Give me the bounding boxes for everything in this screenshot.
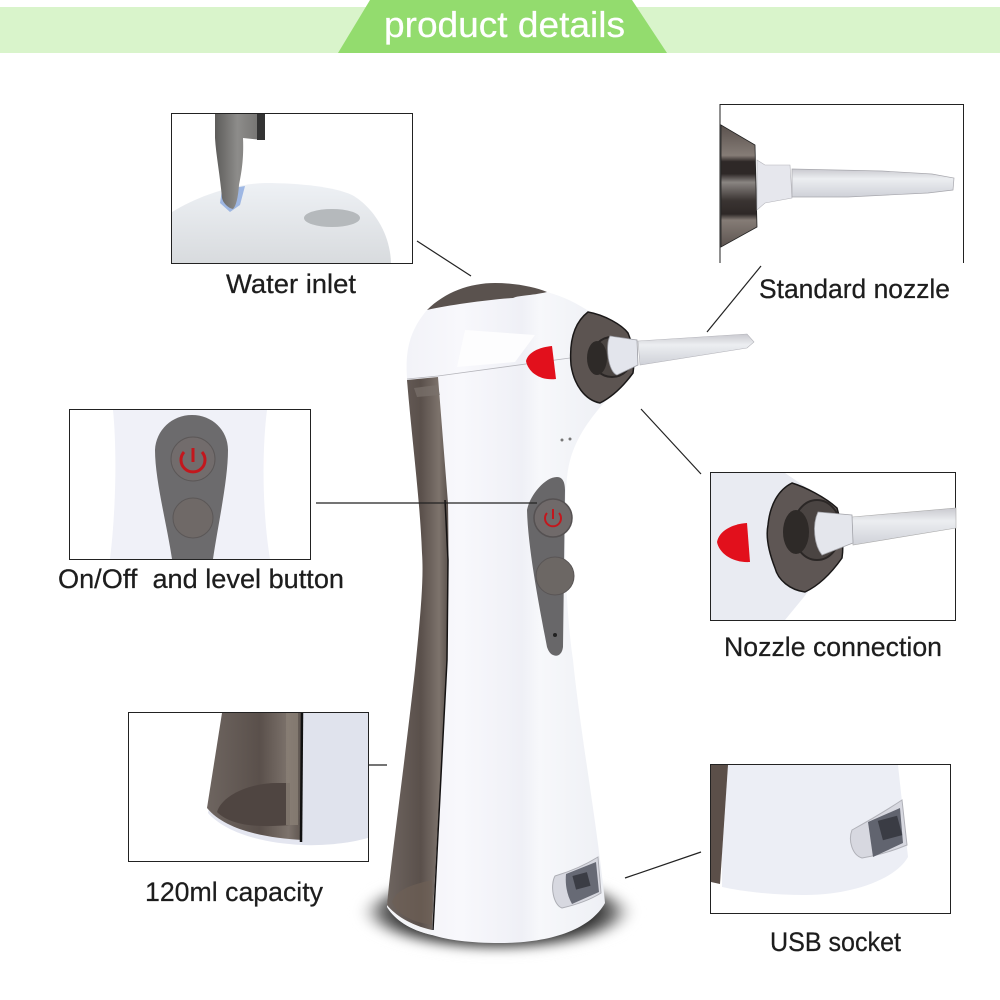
indicator dots: [560, 438, 572, 442]
panel: standard nozzle: [720, 104, 964, 263]
power and level panel: [527, 477, 574, 656]
top cap: [427, 283, 547, 310]
usb socket: [553, 857, 601, 908]
base rim: [387, 903, 432, 935]
water tank: [387, 377, 448, 930]
device body: [387, 283, 633, 943]
product: water flosser: [355, 283, 754, 954]
nozzle: [638, 334, 754, 365]
label: nozzle connection: Nozzle connection: [724, 632, 942, 662]
label: water inlet: Water inlet: [226, 269, 356, 299]
banner: product details: [0, 0, 1000, 53]
label: on/off and level button: On/Off and level button: [58, 564, 344, 594]
nozzle collar: [571, 312, 638, 403]
red release button: [526, 346, 556, 379]
banner: product details: product details: [384, 4, 625, 45]
seam and highlight: [407, 358, 570, 379]
panel: water inlet: [172, 114, 412, 264]
panel: nozzle connection: [710, 472, 956, 620]
leader lines: [316, 241, 761, 878]
panel: 120ml capacity: [128, 712, 368, 862]
panel: on/off and level button: [70, 410, 310, 560]
panel: usb socket: [710, 764, 950, 914]
label: 120ml capacity: 120ml capacity: [145, 877, 323, 907]
label: usb socket: USB socket: [770, 927, 901, 957]
label: standard nozzle: Standard nozzle: [759, 274, 950, 304]
